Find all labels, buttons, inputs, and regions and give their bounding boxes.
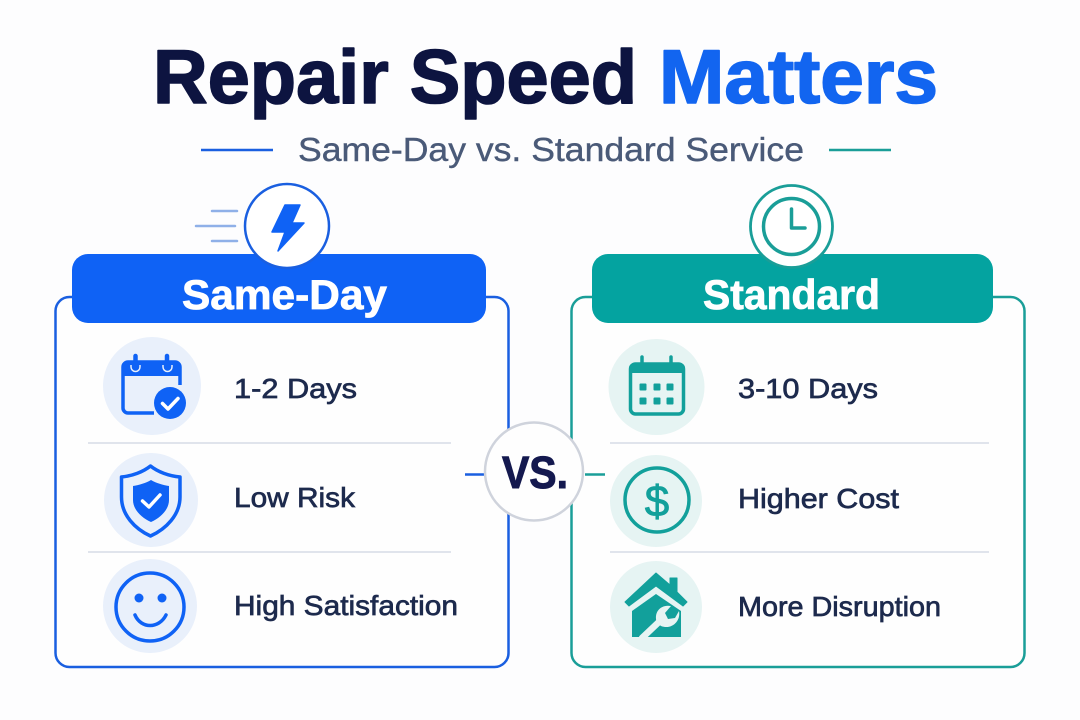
panel: standard [572,186,1024,667]
icon: shield check [122,466,180,536]
card outline: standard [572,297,1024,667]
vs badge: VS. [502,447,568,498]
header: standard: Standard [703,271,880,318]
label: High Satisfaction [234,590,458,621]
connector: left [465,473,485,476]
label: More Disruption [738,591,941,622]
icon: house wrench [625,573,687,638]
row: higher cost [610,455,899,547]
header: same-day [72,254,486,323]
vs badge [485,422,583,520]
icon: clock [750,186,832,268]
row: 1-2 days [103,337,357,435]
header: standard [592,254,993,323]
icon: calendar [629,357,685,414]
title: Matters [659,35,938,120]
icon: dollar [625,468,689,532]
icon: lightning bolt [196,184,329,268]
label: 1-2 Days [234,373,357,404]
label: Higher Cost [738,483,899,514]
icon: dollar: $ [645,477,669,526]
title [153,35,938,120]
header: same-day: Same-Day [182,271,388,318]
row: low risk [104,453,356,547]
icon: calendar check [122,356,186,419]
panel: same-day [56,184,508,667]
icon: smiley [116,573,184,641]
row: more disruption [610,561,941,653]
subtitle: Same-Day vs. Standard Service [298,131,804,168]
title: Repair Speed [153,35,637,120]
row: 3-10 days [608,339,878,435]
label: Low Risk [234,482,356,513]
row: high satisfaction [103,559,458,653]
label: 3-10 Days [738,373,878,404]
connector: right [585,473,605,476]
card outline: same-day [56,297,508,667]
